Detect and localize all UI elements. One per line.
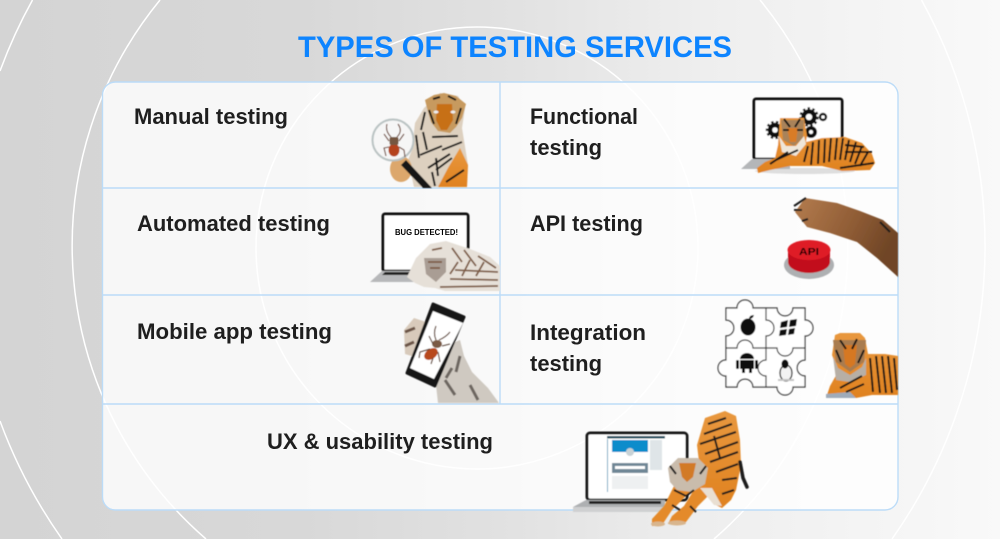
icon: white tiger before laptop xyxy=(370,214,500,291)
heading: manual testing: Manual testing xyxy=(134,104,288,129)
heading: mobile app testing: Mobile app testing xyxy=(137,319,332,344)
panel: services table xyxy=(102,82,898,510)
cell: manual testing xyxy=(134,93,468,188)
cell: mobile app testing xyxy=(137,304,499,403)
heading: functional testing: Functional xyxy=(530,104,638,129)
heading: functional testing: testing xyxy=(530,135,602,160)
icon: puzzle of platforms xyxy=(718,300,813,395)
heading: integration testing: testing xyxy=(530,351,602,376)
heading: functional testing xyxy=(530,104,638,160)
text: bug detected: BUG DETECTED! xyxy=(395,227,458,237)
icon: paw holding phone xyxy=(404,304,499,403)
icon: apple xyxy=(740,315,756,336)
icon: tiger with magnifying glass xyxy=(372,93,468,188)
title: TYPES OF TESTING SERVICES xyxy=(298,31,732,64)
icon: tiger lying before laptop xyxy=(741,99,875,174)
icon: windows xyxy=(779,319,797,336)
cell: API testing xyxy=(530,198,898,279)
cell: UX and usability testing xyxy=(267,411,747,526)
cell: functional testing xyxy=(530,99,875,174)
icon: linux xyxy=(778,360,794,381)
icon: sitting tiger xyxy=(826,333,898,398)
icon: beetle xyxy=(419,326,450,364)
icon: paw over button xyxy=(784,198,898,279)
cell: integration testing xyxy=(530,300,898,398)
heading: API testing: API testing xyxy=(530,211,643,236)
heading: automated testing: Automated testing xyxy=(137,211,330,236)
icon: red API button: API xyxy=(799,246,819,258)
heading: UX and usability testing: UX & usability testing xyxy=(267,429,493,454)
cell: automated testing xyxy=(137,211,500,291)
heading: integration testing: Integration xyxy=(530,320,646,345)
icon: stretching tiger xyxy=(651,411,747,526)
icon: laptop with web page xyxy=(573,433,687,512)
icon: android xyxy=(736,353,758,373)
icon: beetle xyxy=(384,124,405,157)
heading: integration testing xyxy=(530,320,646,376)
